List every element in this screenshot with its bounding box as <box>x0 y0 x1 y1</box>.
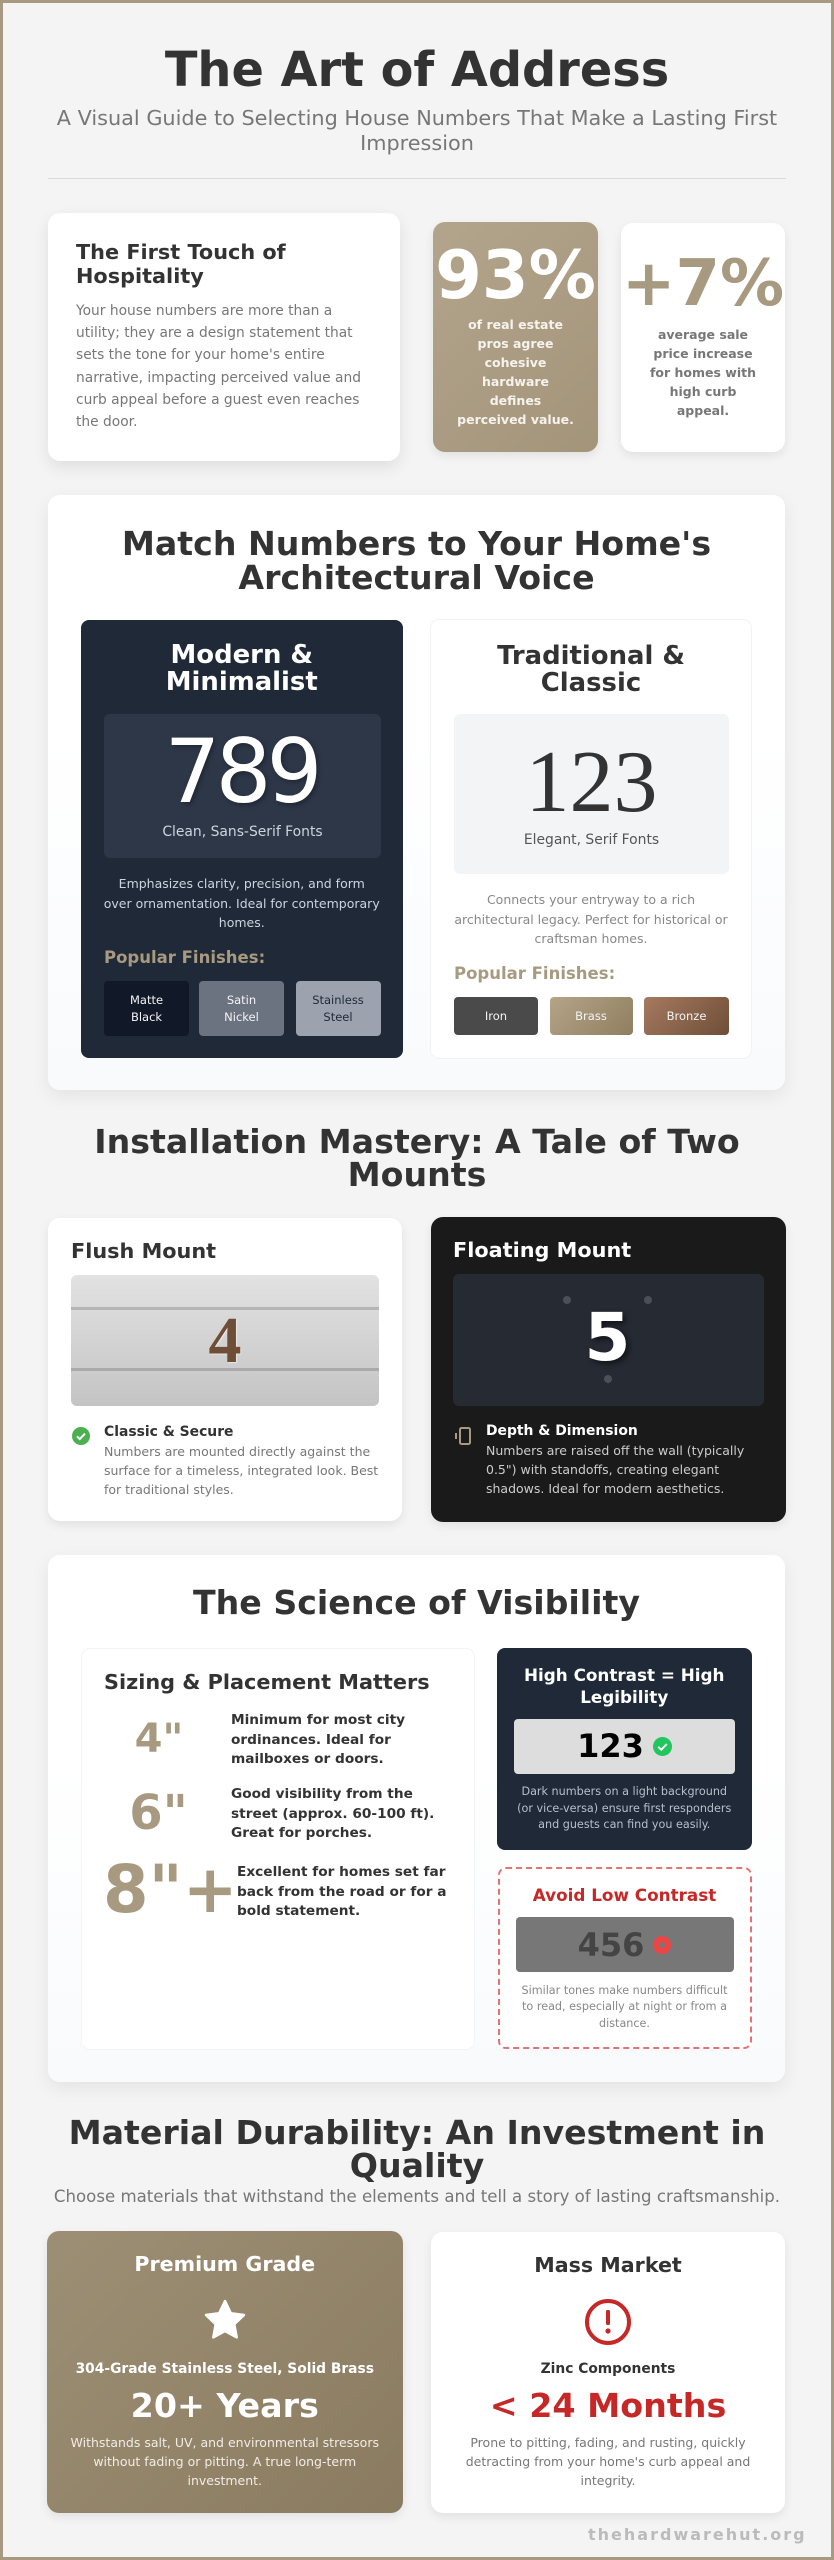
size value: 4" <box>135 1716 183 1762</box>
swatch: stainless steel <box>296 981 380 1036</box>
card heading <box>166 640 318 697</box>
size row: 8 inches plus <box>103 1852 446 1928</box>
description: craftsman homes. <box>535 931 647 946</box>
number 5: 5 <box>585 1299 630 1376</box>
description <box>71 2434 379 2488</box>
size description: Great for porches. <box>231 1825 372 1841</box>
sample caption: Clean, Sans-Serif Fonts <box>162 824 323 840</box>
body text: the door. <box>76 414 137 430</box>
swatch: brass <box>550 997 632 1035</box>
card heading: Premium Grade <box>134 2252 315 2276</box>
card heading: Classic <box>541 668 641 698</box>
stat description: cohesive <box>485 355 546 370</box>
section heading: material durability <box>69 2112 765 2184</box>
card heading: Minimalist <box>166 667 318 697</box>
stat description: price increase <box>653 346 753 361</box>
sizing and placement card <box>82 1648 474 2049</box>
card heading <box>497 641 685 698</box>
subtitle <box>57 106 777 154</box>
size description <box>231 1712 405 1767</box>
panel: architectural voice <box>48 495 785 1090</box>
size row: 4 inches <box>135 1712 405 1767</box>
icon: exclamation circle <box>585 2299 631 2345</box>
body text: Your house numbers are more than a <box>76 303 332 319</box>
stat card: 93 percent <box>433 222 598 452</box>
stat description <box>457 316 574 427</box>
explanation <box>517 1785 731 1831</box>
card heading: Sizing & Placement Matters <box>104 1670 430 1694</box>
watermark: thehardwarehut.org <box>588 2525 807 2544</box>
low contrast sample: 456 <box>578 1926 644 1964</box>
stat description: for homes with <box>650 365 756 380</box>
description: Withstands salt, UV, and environmental stressors <box>71 2434 379 2450</box>
feature heading: Classic & Secure <box>104 1424 233 1440</box>
lifespan: < 24 Months <box>490 2386 726 2425</box>
subtitle: Impression <box>360 130 474 154</box>
stat description: perceived value. <box>457 412 574 427</box>
swatch: bronze <box>644 997 729 1035</box>
card heading: Avoid Low Contrast <box>533 1885 716 1905</box>
size description: Minimum for most city <box>231 1712 405 1728</box>
finishes label: Popular Finishes: <box>104 948 265 967</box>
feature text: shadows. Ideal for modern aesthetics. <box>486 1481 724 1496</box>
description: Emphasizes clarity, precision, and form <box>119 876 365 891</box>
description: investment. <box>187 2473 262 2488</box>
header divider <box>48 178 786 179</box>
finishes label: Popular Finishes: <box>454 964 615 983</box>
stat description: hardware <box>482 374 549 389</box>
explanation: (or vice-versa) ensure first responders <box>517 1802 731 1815</box>
description: without fading or pitting. A true long-term <box>93 2454 356 2469</box>
section heading: installation <box>94 1122 740 1194</box>
stat number: 93% <box>435 236 596 314</box>
swatch: matte black: Black <box>131 1010 162 1024</box>
description: architectural legacy. Perfect for historical or <box>454 912 728 927</box>
heading <box>76 240 286 288</box>
size description: ordinances. Ideal for <box>231 1732 391 1748</box>
icon: mobile vibrate <box>455 1427 471 1445</box>
swatch: satin nickel: Nickel <box>224 1010 259 1024</box>
floating number illustration <box>453 1274 764 1406</box>
material name: Zinc Components <box>541 2361 675 2377</box>
stat description: defines <box>490 393 541 408</box>
high contrast sample: 123 <box>577 1727 644 1765</box>
card heading <box>524 1665 725 1707</box>
sample number 123: 123 <box>526 734 658 831</box>
icon: star <box>204 2300 246 2339</box>
heading: The First Touch of <box>76 240 286 264</box>
swatch: stainless steel: Stainless <box>312 993 364 1007</box>
swatch: stainless steel: Steel <box>323 1010 353 1024</box>
size description: street (approx. 60-100 ft). <box>231 1806 434 1822</box>
size description: bold statement. <box>237 1903 360 1919</box>
section heading: material durability: Material Durability: An Investment in <box>69 2112 765 2152</box>
title: The Art of Address <box>165 43 669 98</box>
explanation: Similar tones make numbers difficult <box>521 1984 728 1997</box>
description <box>466 2435 750 2488</box>
section heading: installation: Installation Mastery: A Tale of Two <box>94 1122 740 1160</box>
size description <box>231 1786 434 1841</box>
card heading: Traditional & <box>497 641 685 671</box>
feature text: surface for a timeless, integrated look. Best <box>104 1463 378 1478</box>
panel: flush mount <box>48 1218 402 1521</box>
description: homes. <box>219 915 265 930</box>
stat description <box>650 326 756 418</box>
explanation <box>521 1984 728 2030</box>
body text: curb appeal before a guest even reaches <box>76 392 359 408</box>
swatch: iron <box>454 997 538 1035</box>
sample caption: Elegant, Serif Fonts <box>524 832 659 848</box>
number sample box <box>454 714 729 874</box>
panel: science of visibility <box>48 1555 785 2082</box>
icon: green check <box>653 1737 672 1756</box>
material name: 304-Grade Stainless Steel, Solid Brass <box>76 2361 374 2377</box>
description <box>454 892 728 946</box>
explanation: and guests can find you easily. <box>538 1818 710 1831</box>
swatch: matte black: Matte <box>130 993 163 1007</box>
header <box>48 43 786 179</box>
swatch: iron: Iron <box>485 1009 507 1023</box>
swatch: matte black <box>104 981 189 1036</box>
description: detracting from your home's curb appeal and <box>466 2454 750 2469</box>
sample number 789: 789 <box>165 720 317 822</box>
high contrast sample <box>514 1719 735 1774</box>
number sample box <box>104 714 381 858</box>
card heading: Mass Market <box>534 2253 682 2277</box>
traditional and classic card <box>431 620 751 1058</box>
body text: narrative, impacting perceived value and <box>76 370 361 386</box>
stat description: of real estate <box>468 316 563 332</box>
feature text: 0.5") with standoffs, creating elegant <box>486 1462 719 1477</box>
section heading: Match Numbers to Your Home's <box>122 524 711 563</box>
card heading: Floating Mount <box>453 1238 631 1262</box>
explanation: to read, especially at night or from a <box>522 2000 727 2013</box>
size value: 6" <box>129 1785 188 1841</box>
stat description: high curb <box>670 384 736 399</box>
modern and minimalist card <box>81 620 402 1058</box>
feature text: for traditional styles. <box>104 1482 234 1497</box>
size description: Excellent for homes set far <box>237 1864 445 1880</box>
panel: floating mount <box>431 1217 786 1522</box>
panel: mass market <box>431 2232 785 2513</box>
description: over ornamentation. Ideal for contemporary <box>104 896 380 911</box>
card heading: High Contrast = High <box>524 1665 725 1685</box>
section subtitle: Choose materials that withstand the elements and tell a story of lasting craftsmanship. <box>54 2187 780 2206</box>
stat number: +7% <box>622 247 784 321</box>
siding illustration <box>71 1275 379 1406</box>
size value: 8"+ <box>103 1852 238 1928</box>
feature text: Numbers are mounted directly against the <box>104 1444 370 1458</box>
size description: Good visibility from the <box>231 1786 413 1802</box>
description: Prone to pitting, fading, and rusting, quickly <box>470 2435 746 2450</box>
size description <box>237 1864 446 1919</box>
section heading: installation: Mounts <box>348 1154 486 1194</box>
heading: Hospitality <box>76 264 204 288</box>
swatch: bronze: Bronze <box>667 1009 706 1023</box>
section heading: Architectural Voice <box>238 558 595 597</box>
lifespan: 20+ Years <box>131 2386 319 2425</box>
body text: utility; they are a design statement that <box>76 325 353 341</box>
icon: check circle <box>72 1427 90 1445</box>
section heading <box>122 524 711 597</box>
number 4: 4 <box>208 1304 242 1377</box>
size description: mailboxes or doors. <box>231 1751 384 1767</box>
feature text: Numbers are raised off the wall (typically <box>486 1442 744 1458</box>
card heading: Flush Mount <box>71 1239 216 1263</box>
high contrast card <box>497 1648 752 1850</box>
description: Connects your entryway to a rich <box>487 892 695 907</box>
swatch: brass: Brass <box>575 1009 607 1023</box>
low contrast card <box>498 1867 752 2049</box>
low contrast sample <box>516 1917 734 1972</box>
body text <box>76 303 361 430</box>
subtitle: A Visual Guide to Selecting House Numbers That Make a Lasting First <box>57 106 777 130</box>
stat description: pros agree <box>478 336 554 351</box>
stat card: plus 7 percent <box>621 223 785 452</box>
panel: first touch of hospitality <box>48 213 400 461</box>
feature text <box>486 1442 744 1496</box>
feature heading: Depth & Dimension <box>486 1423 638 1439</box>
icon: red warning ring <box>653 1936 671 1954</box>
explanation: distance. <box>599 2017 650 2030</box>
feature text <box>104 1444 378 1497</box>
section heading: The Science of Visibility <box>193 1583 640 1622</box>
card heading: Modern & <box>171 640 313 670</box>
swatch: satin nickel: Satin <box>227 993 256 1007</box>
section heading: material durability: Quality <box>350 2146 484 2184</box>
explanation: Dark numbers on a light background <box>521 1785 727 1798</box>
description <box>104 876 380 930</box>
size row: 6 inches <box>129 1785 434 1841</box>
size description: back from the road or for a <box>237 1884 446 1900</box>
stat description: appeal. <box>677 403 729 418</box>
stat description: average sale <box>658 326 748 342</box>
card heading: Legibility <box>580 1687 668 1707</box>
description: integrity. <box>580 2473 636 2488</box>
panel: premium grade <box>47 2231 402 2513</box>
swatch: satin nickel <box>199 981 284 1036</box>
body text: sets the tone for your home's entire <box>76 347 325 363</box>
